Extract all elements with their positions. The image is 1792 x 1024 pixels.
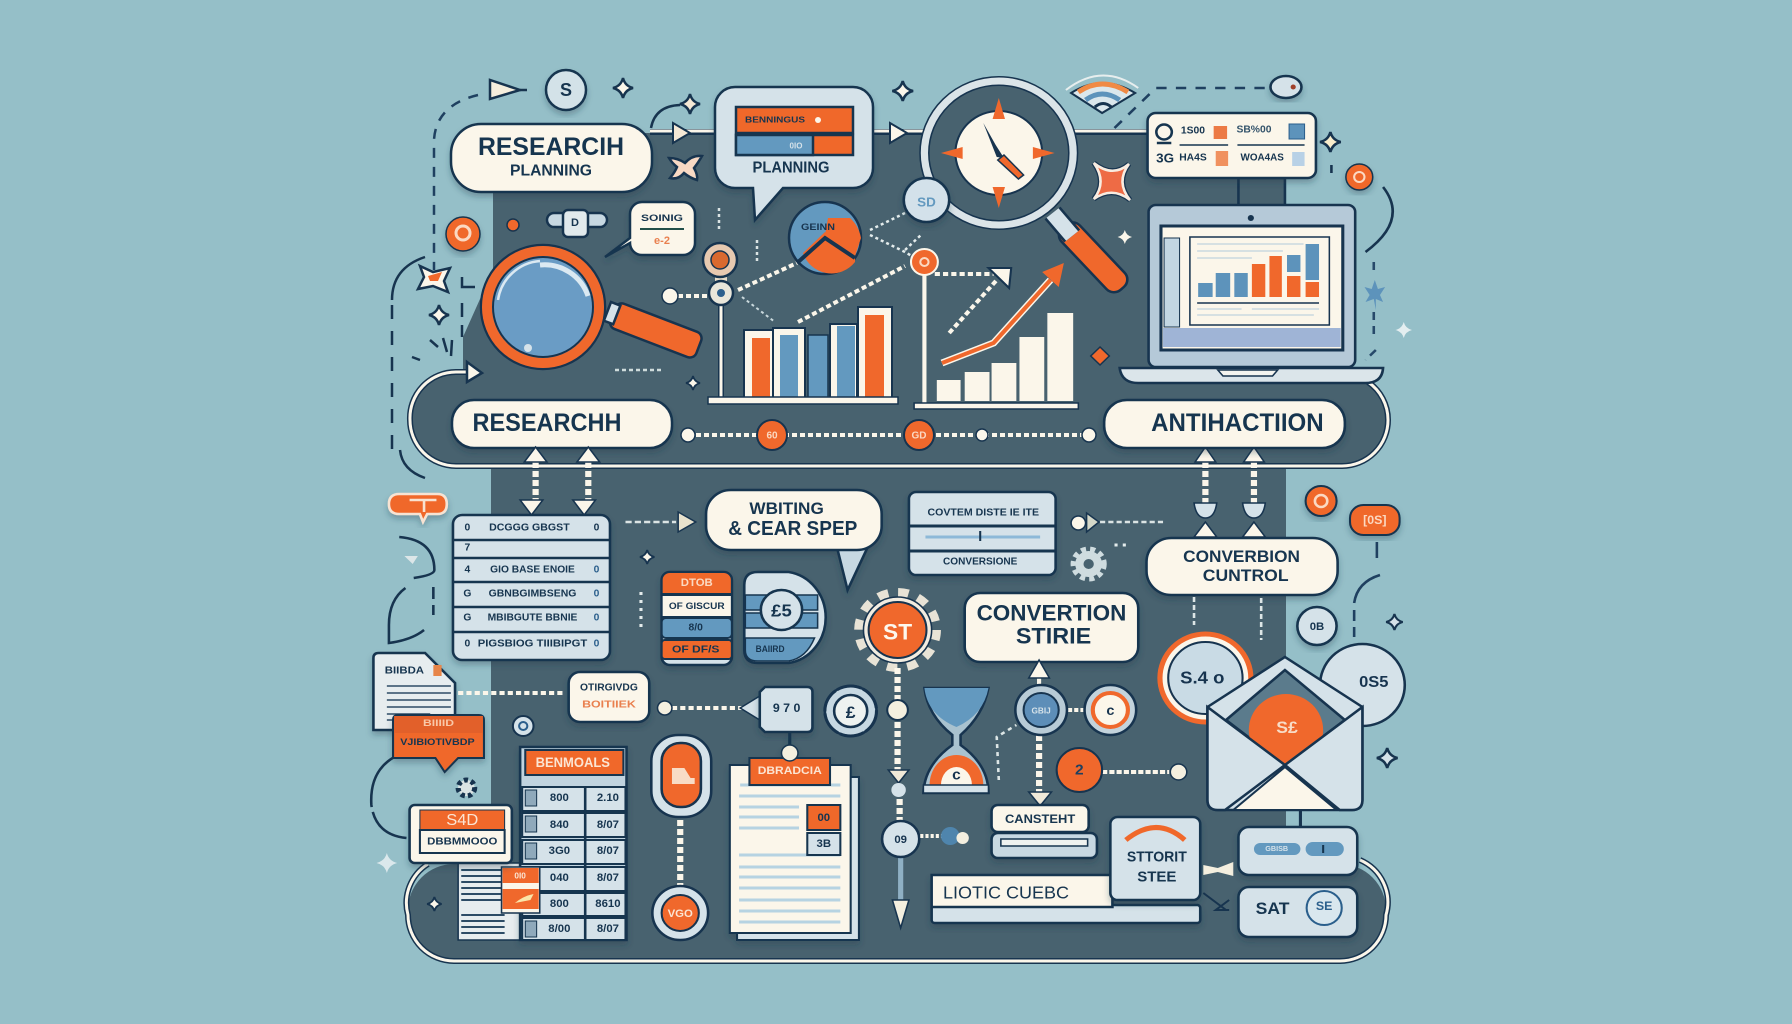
icon: x star [669, 156, 702, 180]
card: objective: BOITIIEK [582, 700, 637, 710]
icon: small gear [458, 780, 475, 796]
label: researchh: RESEARCHH [472, 409, 622, 437]
speech bubble: planning [715, 87, 873, 220]
table: bendols: 840 [550, 819, 569, 831]
table: bendols: 8/07 [597, 872, 619, 884]
right icons: blue star and dashes [1364, 262, 1412, 360]
pound coin [825, 686, 876, 736]
stack card [662, 572, 732, 665]
speech bubble: writing: & CEAR SPEP [728, 518, 857, 540]
dashed link to objective [458, 691, 565, 695]
coin widget: BAIIRD [756, 644, 785, 654]
speech bubble: small note [605, 202, 695, 257]
icon: orange badge [446, 217, 480, 251]
table: list: 0 [594, 565, 600, 575]
icon: clock magnifier [924, 81, 1132, 296]
label bar: liotic cuebc [932, 875, 1200, 923]
connector column [1238, 178, 1285, 208]
dashed verticals [1194, 597, 1261, 640]
icon: gear [859, 593, 936, 667]
dark board panels [406, 133, 1388, 961]
flow: node cluster: c [1106, 703, 1114, 719]
flow: vertical gear line: 09 [894, 834, 907, 846]
orange speech tag: VJIBIOTIVBDP [400, 737, 475, 747]
right arc [1366, 187, 1393, 252]
dashed flow node [1071, 513, 1164, 545]
small orange dot [507, 219, 519, 231]
pin node [662, 243, 737, 398]
icon: hourglass: c [952, 767, 961, 783]
top connector line [650, 123, 1152, 143]
icon: envelope: S£ [1276, 717, 1298, 737]
section: lower right [859, 486, 1405, 937]
card: canstett: CANSTEHT [1005, 812, 1076, 826]
orange badge [1306, 486, 1337, 516]
icon: gear: ST [883, 620, 912, 644]
icon: sparkle [892, 81, 913, 101]
back circles: 0S5 [1359, 673, 1388, 691]
card: stort stee: STTORIT [1127, 849, 1187, 865]
document: left brief: BIIBDA [385, 666, 425, 676]
speech bubble: writing [706, 490, 882, 590]
data card: SB%00 [1236, 125, 1272, 135]
icon: toggle: D [571, 217, 579, 229]
table: bendols: 8/00 [548, 923, 570, 935]
table: list: MBIBGUTE BBNIE [488, 613, 578, 623]
table: bendols: 2.10 [597, 792, 619, 804]
icon: dollar coin: S [560, 80, 572, 100]
back circles: S.4 o [1180, 667, 1224, 687]
right cards: GBISB [1265, 845, 1288, 853]
orange speech tag [393, 715, 484, 772]
back circles [1160, 634, 1405, 726]
icon: orange star [418, 266, 450, 292]
dashed arrow to writing [625, 512, 696, 532]
card: conversion strie: CONVERTION [977, 601, 1126, 625]
left decorative arcs [371, 537, 434, 838]
progress track: 60 [766, 430, 778, 442]
table: list: G [463, 613, 472, 623]
flow: node cluster [997, 660, 1136, 806]
document: details: DBRADCIA [758, 765, 822, 777]
speech bubble: planning: BENNINGUS [745, 116, 806, 124]
stack card: 8/0 [689, 623, 703, 633]
table: list: 7 [465, 543, 471, 553]
icon: grey gear [1073, 549, 1104, 579]
small circle badge [1297, 607, 1337, 645]
icon: wifi [1066, 75, 1138, 113]
data card: 1S00 [1181, 126, 1205, 136]
table: list: 0 [594, 613, 600, 623]
laptop [1120, 205, 1383, 383]
right curve and dashes [1354, 542, 1380, 637]
section: lower left [371, 447, 882, 940]
card: objective: OTIRGIVDG [580, 683, 638, 693]
data card: 3G [1156, 151, 1174, 165]
table: list: 4 [465, 565, 471, 575]
label: researchh [452, 400, 672, 448]
card: conversion strie [965, 593, 1138, 662]
icon: dollar coin [546, 70, 586, 110]
stack card: OF GISCUR [669, 601, 725, 611]
label bar: liotic cuebc: LIOTIC CUEBC [943, 882, 1069, 902]
node link to tag [658, 696, 760, 720]
card: s4d: S4D [446, 811, 478, 829]
flow: vertical gear line [882, 668, 969, 928]
dotted vertical [639, 592, 642, 630]
curved arrow to sparkle [651, 94, 700, 128]
stack card: OF DF/S [672, 645, 720, 655]
card: stort stee [1110, 817, 1200, 900]
table: bendols [520, 747, 627, 940]
icon: sparkle [1118, 230, 1132, 244]
icon: sparkle [429, 305, 449, 325]
table: bendols: 800 [550, 792, 569, 804]
pound coin: £ [846, 702, 856, 722]
table: list: GBNBGIMBSENG [489, 589, 577, 599]
section: upper right [892, 75, 1412, 537]
table: list: 0 [465, 523, 471, 533]
data card [1148, 113, 1316, 178]
dashed left path [434, 95, 478, 270]
right sparkles [1377, 614, 1403, 768]
heading: research planning: RESEARCIH [478, 133, 624, 161]
card: conversion strie: STIRIE [1016, 624, 1091, 648]
table: bendols: 8/07 [597, 819, 619, 831]
left orbit arcs and marks [392, 257, 475, 478]
icon: envelope [1207, 657, 1362, 830]
flow: node cluster: GBIJ [1032, 707, 1051, 715]
document: details: 3B [817, 838, 831, 850]
icon: pointer triangle [490, 80, 527, 99]
data card: WOA4AS [1241, 153, 1284, 163]
orange pill: [0S] [1363, 513, 1387, 527]
document: left brief [373, 653, 455, 730]
right cards [1238, 827, 1357, 937]
speech bubble: planning: 0IO [790, 142, 802, 150]
right cards: SAT [1256, 898, 1290, 918]
data card: HA4S [1179, 153, 1207, 163]
document: details: 00 [817, 812, 830, 824]
dotted verticals [719, 208, 757, 262]
icon: red star [1094, 163, 1130, 200]
icon: sparkle [613, 78, 633, 98]
vertical arrows: research [520, 447, 600, 515]
icon: orange badge [1346, 164, 1373, 190]
table: list: PIGSBIOG TIIIBIPGT [478, 639, 588, 649]
card: conversion rows: CONVERSIONE [943, 557, 1018, 567]
line chart: rising bars [911, 249, 1078, 409]
icon: magnifying glass [481, 245, 704, 369]
orange node: 2 [1075, 762, 1084, 778]
heading: research planning [451, 124, 652, 192]
icon: orange diamond [1091, 347, 1109, 365]
speech bubble: small note: SOINIG [641, 213, 683, 223]
progress track: GD [912, 430, 926, 442]
tag: 970: 9 7 0 [773, 701, 801, 715]
striped document [458, 863, 539, 940]
pie chart [789, 202, 861, 274]
table: bendols: BENMOALS [536, 755, 610, 771]
table: list [453, 515, 610, 660]
label: antihaction: ANTIHACTIION [1151, 409, 1324, 437]
label: conversion control: CONVERBION [1183, 546, 1300, 566]
orange speech tag: BIIIID [423, 718, 455, 728]
icon: toggle [547, 210, 607, 237]
coin widget: £5 [771, 600, 792, 620]
dashed trend lines [738, 213, 925, 322]
icon: gold sparkle [1320, 132, 1341, 173]
table: list: G [463, 589, 472, 599]
heading: research planning: PLANNING [510, 162, 592, 180]
card: s4d: DBBMMOOO [427, 837, 497, 847]
table: list: 0 [465, 639, 471, 649]
card: objective [569, 672, 649, 722]
mini orange card [502, 867, 540, 913]
stack card: DTOB [681, 577, 713, 589]
table: bendols: 800 [550, 898, 569, 910]
label: conversion control [1147, 538, 1338, 595]
speech bubble: writing: WBITING [749, 498, 824, 518]
node: magnifier badge: SD [917, 195, 936, 209]
small pill [1270, 76, 1301, 98]
table: list: GIO BASE ENOIE [490, 565, 575, 575]
bar chart: research [708, 307, 898, 404]
icon: small heart [404, 556, 418, 564]
orange node [1057, 748, 1187, 792]
card: conversion rows: COVTEM DISTE IE ITE [928, 508, 1039, 518]
orange pill [1350, 505, 1400, 535]
loop arrow head [467, 362, 482, 382]
card: stort stee: STEE [1137, 869, 1176, 885]
card: canstett [992, 805, 1097, 858]
document: details [730, 732, 859, 940]
card: conversion rows [909, 492, 1056, 575]
card: s4d [410, 805, 512, 863]
small circle badge: 0B [1310, 621, 1324, 633]
table: list: DCGGG GBGST [489, 523, 571, 533]
icon: hourglass [923, 688, 988, 793]
mini orange card: 0I0 [514, 872, 526, 880]
left sparkles [377, 853, 442, 911]
decorative sparkle and dash [615, 370, 700, 390]
table: list: 0 [594, 639, 600, 649]
dashed connector [1114, 88, 1269, 128]
small circle [513, 716, 534, 736]
pie chart: GEINN [801, 222, 835, 232]
label: conversion control: CUNTROL [1203, 565, 1289, 585]
orange tag [389, 494, 447, 522]
table: bendols: 8/07 [597, 923, 619, 935]
table: bendols: 8/07 [597, 845, 619, 857]
table: list: 0 [594, 523, 600, 533]
table: bendols: 3G0 [549, 845, 570, 857]
icon: sparkle [640, 550, 654, 564]
label: antihaction [1104, 400, 1345, 448]
speech bubble: small note: e-2 [654, 235, 670, 247]
node: magnifier badge [904, 178, 949, 222]
connector: bow tie [1203, 862, 1233, 910]
progress track [681, 420, 1096, 450]
speech bubble: planning: PLANNING [752, 160, 830, 176]
coin widget [744, 572, 826, 663]
button with knob [651, 735, 711, 940]
button with knob: VGO [668, 908, 693, 920]
table: list: 0 [594, 589, 600, 599]
right cards: SE [1316, 899, 1332, 913]
tag: 970 [760, 687, 812, 732]
vertical arrows: antiaction [1194, 447, 1265, 537]
table: bendols: 8610 [595, 898, 621, 910]
table: bendols: 040 [550, 872, 569, 884]
